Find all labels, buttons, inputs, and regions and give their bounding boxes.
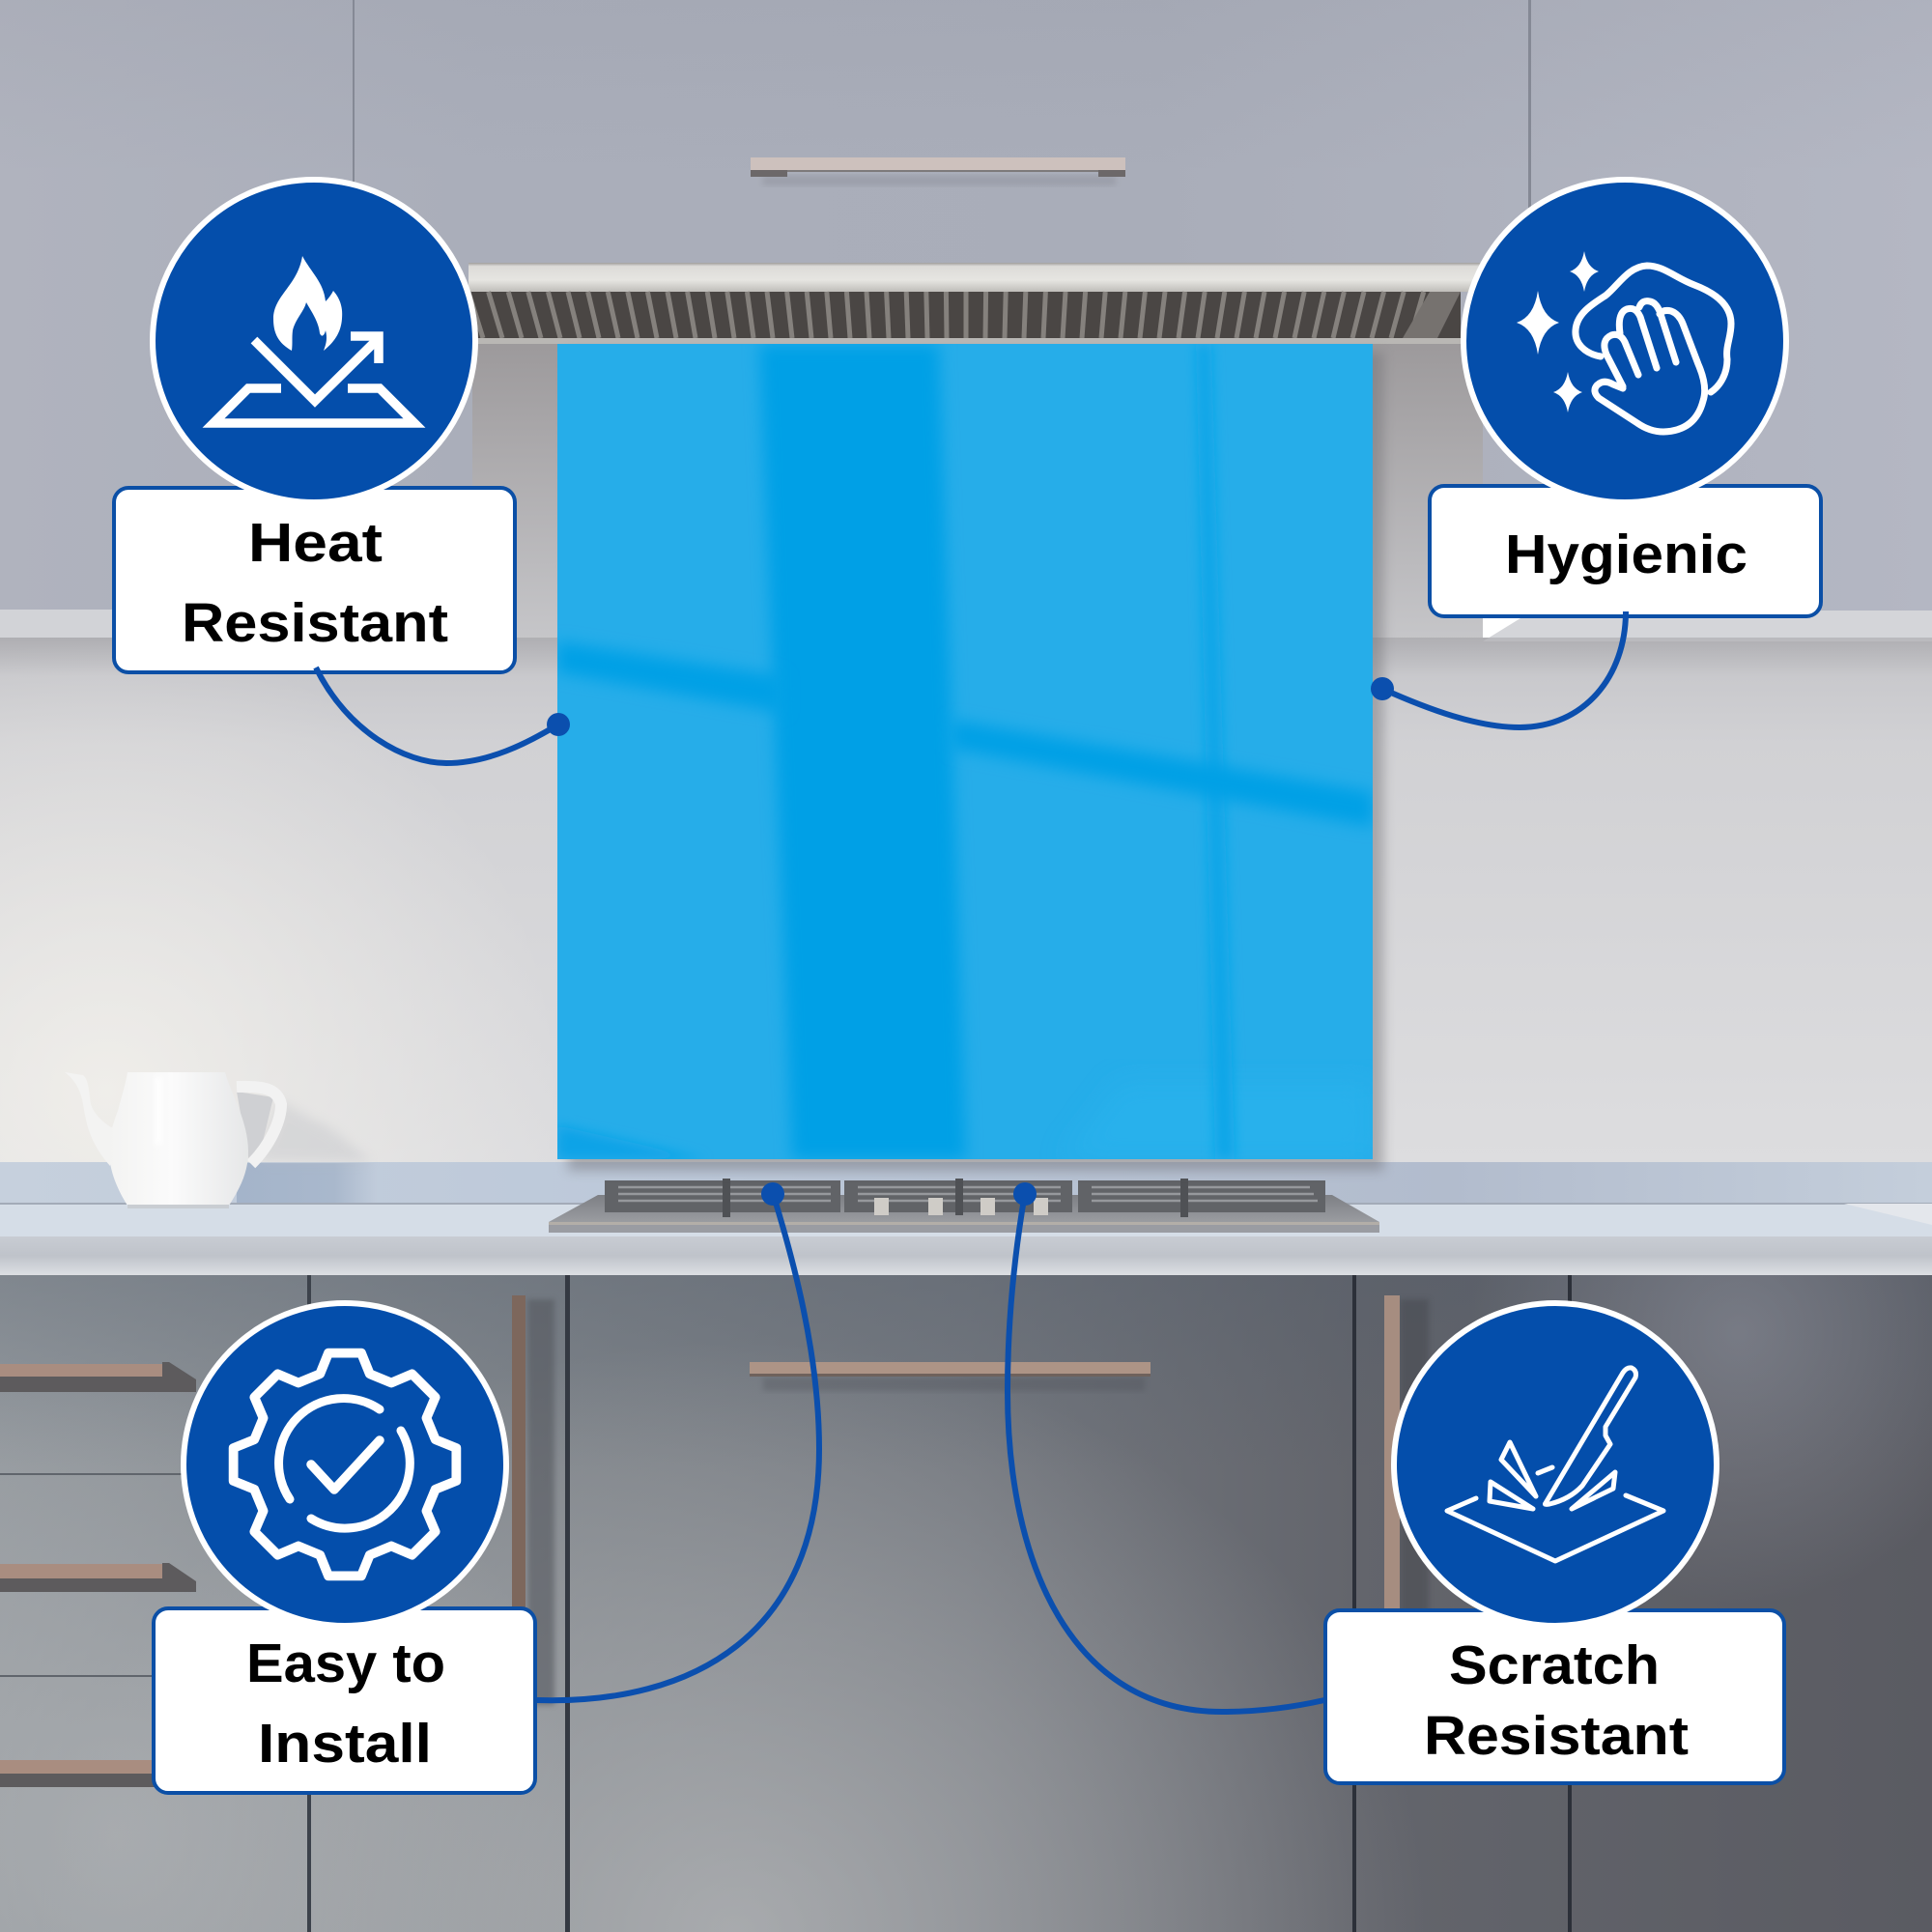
connector: Hygienic to panel <box>1371 611 1626 727</box>
connector: Heat Resistant to panel <box>316 668 570 763</box>
wall <box>0 340 1932 1164</box>
upper cabinet handle <box>751 157 1125 185</box>
centre drawer handle <box>750 1362 1151 1391</box>
upper cabinets <box>0 0 1932 611</box>
lower cabinets <box>0 1275 1932 1932</box>
panel shadow <box>568 352 1383 1171</box>
callout box: Heat Resistant <box>114 488 515 672</box>
ceramic jug <box>65 1072 372 1208</box>
vertical door handles <box>512 1295 1429 1705</box>
icon badge: heat resistant <box>153 180 475 502</box>
label text: Resistant: Resistant <box>182 592 448 654</box>
callout box: Hygienic <box>1430 486 1821 616</box>
label text: Install: Install <box>258 1713 432 1775</box>
label text: Heat: Heat <box>248 512 383 574</box>
callout box: Scratch Resistant <box>1325 1610 1784 1783</box>
label text: Scratch: Scratch <box>1449 1634 1660 1696</box>
drawer handles <box>0 1362 196 1787</box>
connector: Easy to Install to hob <box>537 1182 819 1700</box>
icon badge: hygienic <box>1463 180 1786 502</box>
icon badge: easy to install <box>184 1303 506 1626</box>
panel: blue glass splashback <box>557 344 1373 1159</box>
connector: Scratch Resistant to hob <box>1008 1182 1324 1712</box>
gas hob <box>549 1179 1379 1233</box>
icon badge: scratch resistant <box>1394 1303 1717 1626</box>
label text: Resistant: Resistant <box>1424 1705 1689 1767</box>
label text: Hygienic: Hygienic <box>1505 524 1747 585</box>
countertop <box>0 1162 1932 1275</box>
callout box: Easy to Install <box>154 1608 535 1793</box>
label text: Easy to: Easy to <box>246 1633 445 1694</box>
extractor hood <box>469 263 1483 344</box>
